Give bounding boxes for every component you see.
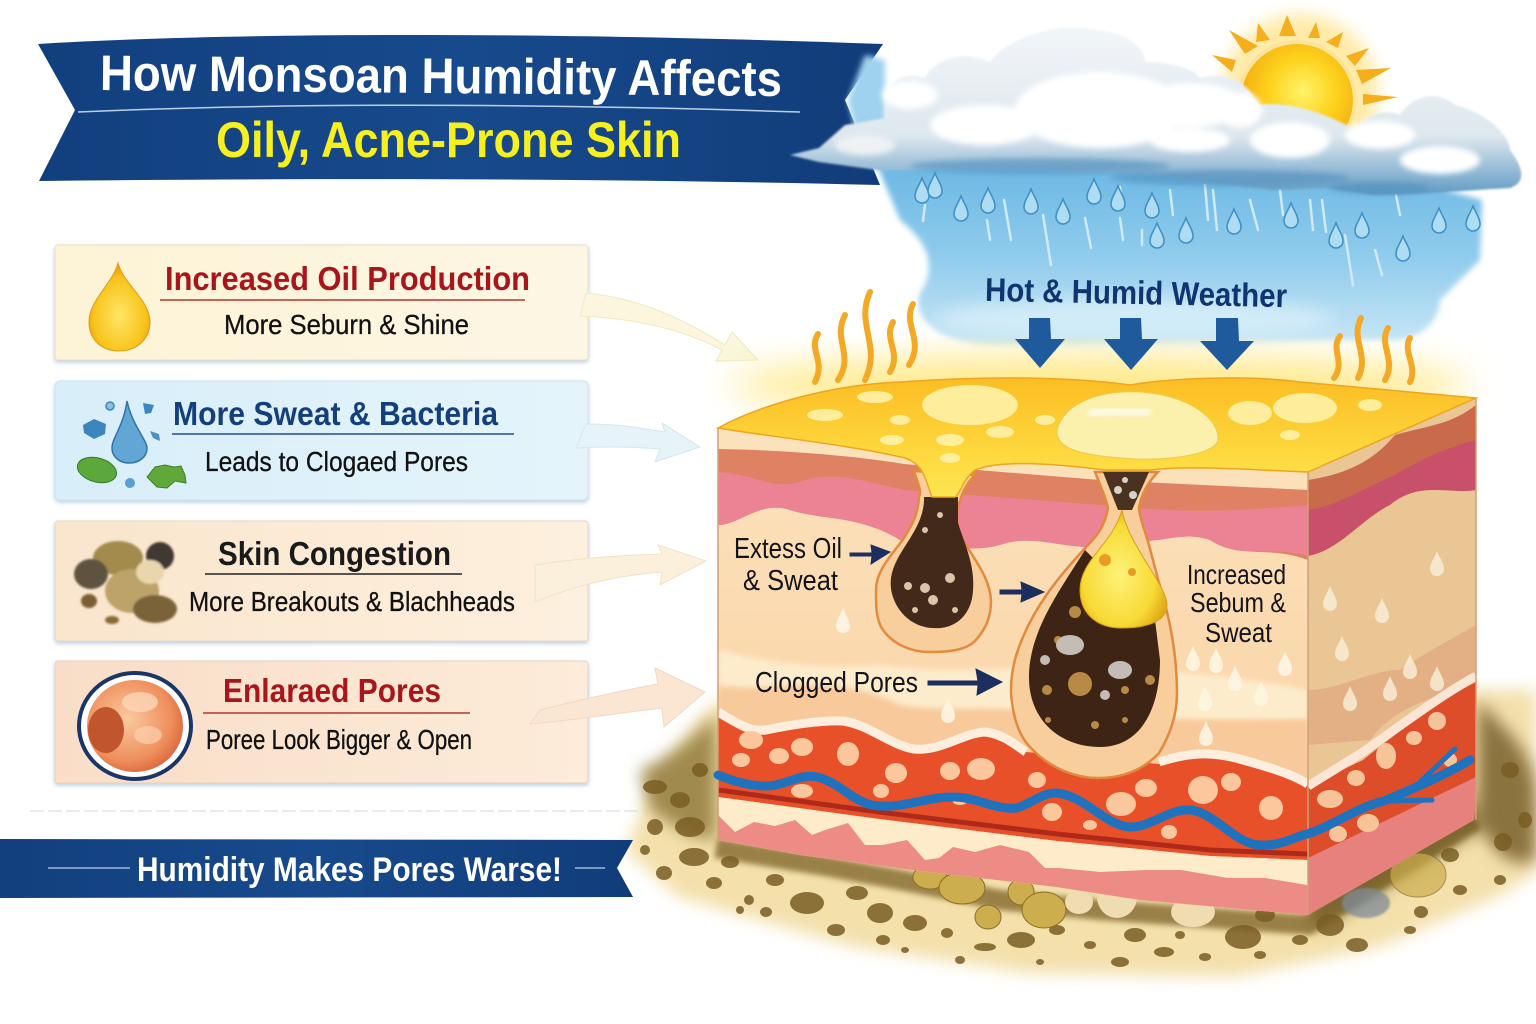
heading: Enlaraed Pores — [223, 672, 441, 709]
title line 1: How Monsoan Humidity Affects — [100, 45, 782, 107]
subtext: More Seburn & Shine — [224, 309, 469, 340]
arrow: oil to skin — [580, 293, 758, 361]
panel: more sweat and bacteria — [55, 381, 588, 500]
label: excess oil and sweat — [734, 533, 842, 597]
label: excess oil and sweat: & Sweat — [743, 565, 838, 597]
oil layer on top — [718, 378, 1476, 497]
label: excess oil and sweat: Extess Oil — [734, 533, 842, 565]
label: clogged pores: Clogged Pores — [755, 667, 918, 699]
panel: skin congestion — [55, 521, 588, 641]
arrow: pores to skin — [530, 668, 705, 727]
weather label: Hot & Humid Weather — [985, 271, 1288, 314]
arrows: downward heat — [1015, 318, 1254, 370]
gold pebbles — [913, 853, 1446, 929]
bottom banner — [0, 839, 633, 898]
sweat droplets in skin — [836, 608, 1292, 746]
soil specks — [640, 762, 1532, 967]
icon: oil drop — [89, 263, 150, 351]
subtext: Leads to Clogaed Pores — [205, 446, 468, 477]
icon: sweat drop and bacteria — [75, 401, 186, 488]
pore right — [1011, 472, 1177, 778]
heat waves left — [815, 292, 915, 382]
arrow: to clogged pore — [1000, 582, 1044, 602]
sky and rain — [848, 55, 1482, 345]
label: increased sebum and sweat — [1187, 559, 1286, 648]
ground: speckled soil around the skin block — [625, 690, 1536, 977]
panel: enlarged pores — [55, 661, 588, 783]
subtext: Poree Look Bigger & Open — [206, 724, 472, 755]
label: increased sebum and sweat: Sweat — [1205, 617, 1272, 648]
heat waves right — [1334, 318, 1412, 382]
arrow: excess oil — [850, 545, 890, 564]
label: increased sebum and sweat: Sebum & — [1190, 587, 1286, 618]
front face layers — [700, 420, 1320, 930]
icon: enlarged pore — [79, 673, 191, 779]
pink base layer — [718, 816, 1308, 915]
pore left — [876, 471, 991, 652]
sebum drop — [1080, 510, 1167, 628]
sun glow over skin block — [730, 355, 1470, 415]
icon: clogged debris — [74, 541, 177, 624]
arrow: congestion to skin — [535, 545, 706, 602]
right face layers — [1308, 399, 1476, 915]
rain cloud — [790, 28, 1521, 195]
arrow: sweat to skin — [576, 423, 700, 462]
title banner — [38, 35, 883, 185]
heading: Skin Congestion — [218, 535, 451, 572]
blue vein — [718, 749, 1470, 845]
title line 2: Oily, Acne-Prone Skin — [216, 112, 681, 168]
heading: Increased Oil Production — [165, 260, 530, 297]
divider — [30, 810, 640, 812]
label: increased sebum and sweat: Increased — [1187, 559, 1286, 590]
pore neck — [1103, 472, 1149, 510]
pore plug — [1029, 550, 1160, 747]
banner text: Humidity Makes Pores Warse! — [137, 851, 562, 889]
block edges — [718, 398, 1476, 915]
heading: More Sweat & Bacteria — [173, 395, 499, 432]
panel: increased oil production — [55, 245, 588, 360]
arrow: clogged pores — [928, 669, 1002, 695]
sun — [1212, 14, 1398, 170]
skin block cross-section — [700, 378, 1480, 930]
subtext: More Breakouts & Blachheads — [189, 586, 515, 617]
